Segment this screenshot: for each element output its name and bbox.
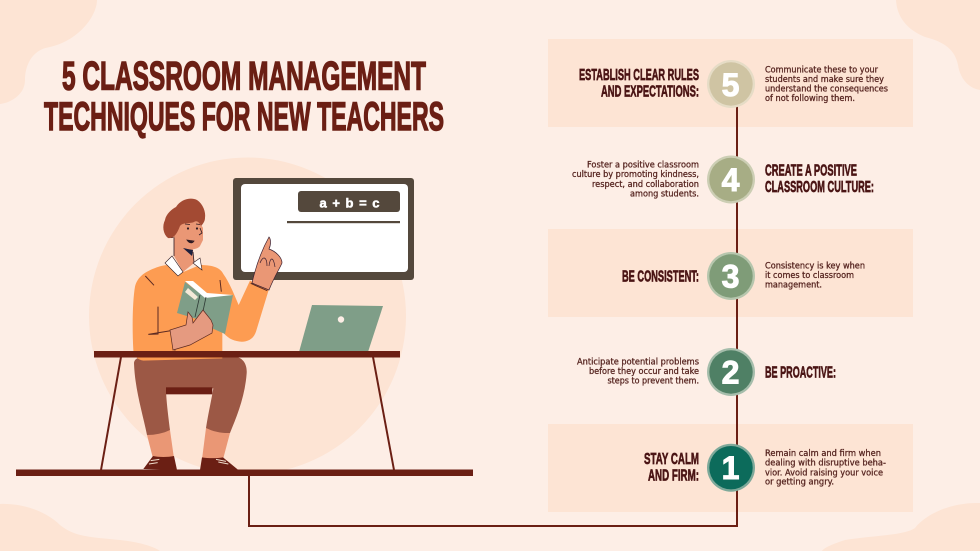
- step 1 description: Remain calm and firm when: [765, 449, 881, 459]
- step 1 description: [765, 449, 886, 488]
- step 4 description: among students.: [630, 190, 699, 200]
- title: 5 CLASSROOM MANAGEMENT: [62, 54, 426, 98]
- step 5 badge: [707, 60, 755, 108]
- whiteboard: [233, 178, 414, 280]
- step 1 description: dealing with disruptive beha-: [765, 459, 886, 469]
- step 5 description: students and make sure they: [765, 75, 884, 85]
- connector line from floor through timeline: [249, 100, 737, 526]
- panel: row 3 background: [548, 229, 913, 317]
- shirt collar: [165, 256, 202, 276]
- step 2: [577, 348, 836, 396]
- step 5 description: [765, 65, 888, 104]
- hair: [163, 199, 205, 238]
- decorative corner blob: top right: [896, 0, 980, 90]
- laptop: [299, 305, 383, 352]
- step 5 description: of not following them.: [765, 94, 855, 104]
- step 1 badge: 1: [722, 450, 739, 486]
- hand finger lines: [260, 258, 275, 267]
- chin shadow: [183, 248, 193, 256]
- sweater: [133, 265, 269, 361]
- neck: [174, 235, 194, 272]
- background circle: [89, 158, 406, 474]
- ear: [167, 228, 177, 238]
- step 2 badge: 2: [722, 354, 739, 390]
- stool seat: [166, 387, 212, 394]
- step 3 badge: [707, 252, 755, 300]
- step 3 description: Consistency is key when: [765, 261, 865, 271]
- step 3 badge: 3: [722, 258, 739, 294]
- illustration: teacher at desk: [16, 158, 473, 476]
- step 1 description: or getting angry.: [765, 478, 834, 488]
- step 4 heading: [765, 163, 874, 196]
- step 2 description: before they occur and take: [589, 367, 699, 377]
- title: TECHNIQUES FOR NEW TEACHERS: [44, 95, 444, 139]
- step 2 description: steps to prevent them.: [608, 376, 699, 386]
- facial features: [185, 224, 202, 243]
- holding hand: [170, 310, 213, 350]
- shoe laces: [149, 459, 228, 464]
- neck outline: [174, 238, 194, 262]
- step 4 description: culture by promoting kindness,: [572, 170, 699, 180]
- step 4 badge: [707, 156, 755, 204]
- sweater fold lines: [145, 276, 267, 351]
- step 1 badge: [707, 444, 755, 492]
- whiteboard: a + b = c: [320, 196, 380, 210]
- panel: row 5 background: [548, 39, 913, 127]
- decorative corner blob: top left: [0, 0, 97, 104]
- step 2 badge: [707, 348, 755, 396]
- step 5 description: understand the consequences: [765, 84, 888, 94]
- step 4: [572, 156, 874, 204]
- book: [177, 281, 233, 334]
- step 3 description: [765, 261, 865, 291]
- body and clothes: [133, 265, 269, 470]
- step 4 badge: 4: [722, 162, 740, 198]
- step 3 description: management.: [765, 281, 822, 291]
- step 2 description: [577, 357, 699, 386]
- decorative corner blob: bottom right: [822, 503, 980, 551]
- trousers: [134, 357, 247, 435]
- raised pointing hand: [252, 237, 282, 290]
- decorative corner blob: bottom left: [0, 504, 160, 551]
- step 1: [644, 444, 886, 492]
- face: [174, 216, 203, 249]
- step 3 description: it comes to classroom: [765, 271, 854, 281]
- desk: [94, 351, 400, 470]
- teacher figure: [133, 199, 282, 470]
- step 5 heading: AND EXPECTATIONS:: [601, 84, 699, 100]
- step 5 heading: ESTABLISH CLEAR RULES: [579, 67, 699, 84]
- step 1 heading: STAY CALM: [644, 451, 699, 468]
- step 5: [579, 60, 888, 108]
- step 3 heading: BE CONSISTENT:: [622, 268, 699, 286]
- step 4 heading: CLASSROOM CULTURE:: [765, 179, 874, 196]
- step 4 description: [572, 161, 699, 200]
- step 2 description: Anticipate potential problems: [577, 357, 699, 367]
- lower legs: [147, 428, 230, 459]
- step 4 description: Foster a positive classroom: [587, 161, 699, 171]
- step 1 heading: [644, 451, 699, 484]
- panel: row 1 background: [548, 424, 913, 512]
- step 3: [622, 252, 865, 300]
- step 5 description: Communicate these to your: [765, 65, 878, 75]
- shoes: [143, 456, 238, 470]
- step 5 heading: [579, 67, 699, 100]
- title: [44, 54, 444, 139]
- step 2 heading: BE PROACTIVE:: [765, 364, 836, 381]
- step 5 badge: 5: [722, 67, 739, 103]
- floor line: [16, 470, 473, 476]
- step 1 heading: AND FIRM:: [648, 467, 699, 484]
- step 4 heading: CREATE A POSITIVE: [765, 163, 857, 180]
- step 4 description: respect, and collaboration: [592, 180, 699, 190]
- step 1 description: vior. Avoid raising your voice: [765, 468, 883, 478]
